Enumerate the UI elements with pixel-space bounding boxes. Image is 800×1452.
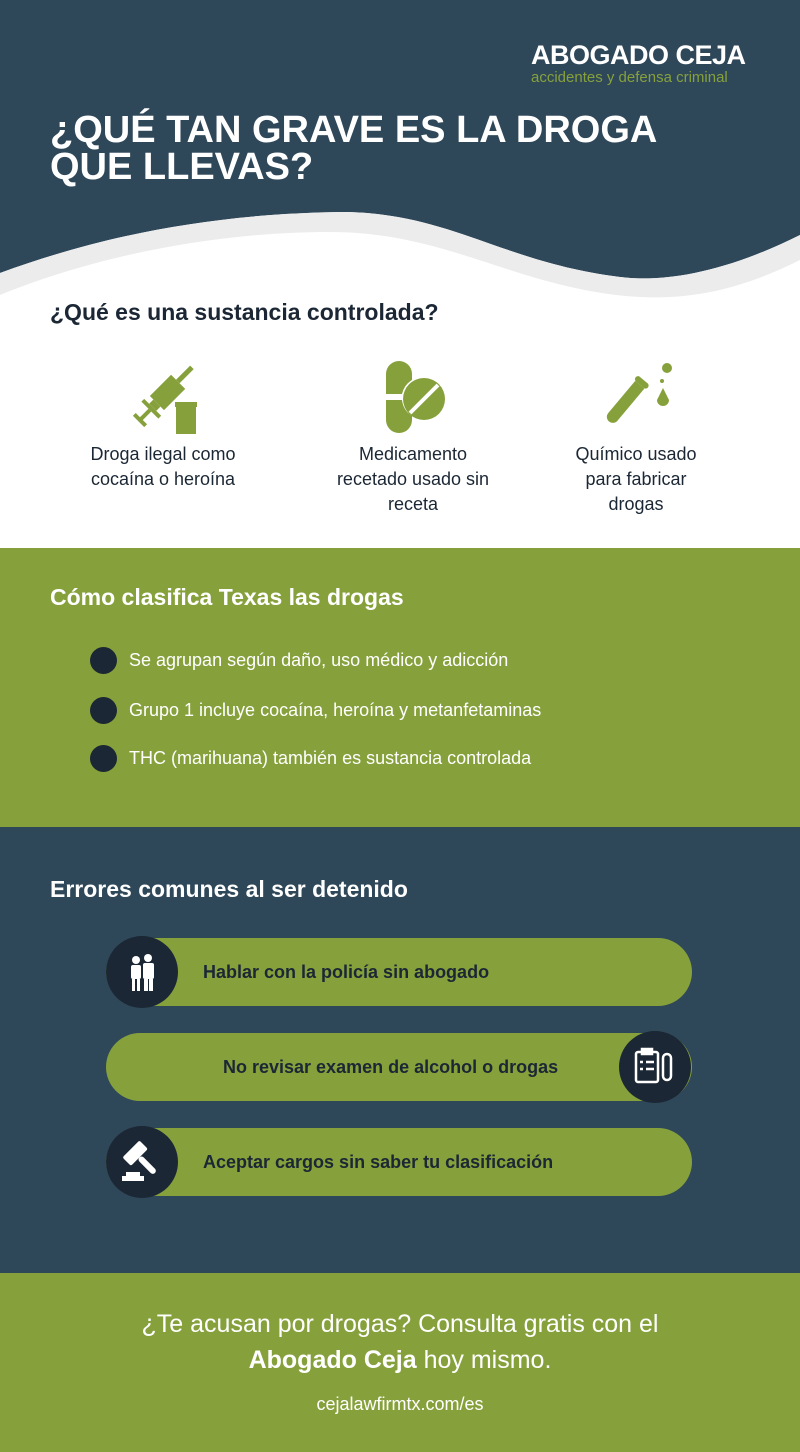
footer call to action (0, 1273, 800, 1452)
label: Químico usado para fabricar drogas (575, 444, 697, 514)
pill 3: Aceptar cargos sin saber tu clasificación (203, 1152, 553, 1172)
pill 2 (106, 1033, 692, 1101)
bullet 2: Grupo 1 incluye cocaína, heroína y metanfetaminas (129, 700, 541, 720)
item: medicamento (337, 361, 489, 514)
cta text: ¿Te acusan por drogas? Consulta gratis con el (142, 1310, 658, 1338)
heading: Errores comunes al ser detenido (50, 876, 408, 902)
pill 1 (106, 938, 692, 1006)
bullet 1 (90, 647, 508, 674)
logo: accidentes y defensa criminal (531, 69, 728, 86)
panel: clasificación (0, 548, 800, 827)
icon: gavel (106, 1126, 178, 1198)
header background with wave (0, 0, 800, 298)
heading: sustancia controlada: ¿Qué es una sustancia controlada? (50, 299, 439, 325)
logo: ABOGADO CEJA (531, 40, 746, 70)
pill 3 (106, 1128, 692, 1196)
icon: test tube (606, 363, 672, 423)
panel: errores (0, 827, 800, 1273)
label: Droga ilegal como cocaína o heroína (90, 444, 236, 489)
logo (531, 40, 746, 86)
title (50, 108, 657, 188)
label: Medicamento recetado usado sin receta (337, 444, 489, 514)
item: químico (575, 363, 697, 514)
item: droga ilegal (90, 366, 236, 489)
icon: pills (386, 361, 445, 433)
bullet 1: Se agrupan según daño, uso médico y adicción (129, 650, 508, 670)
cta text: Abogado Ceja hoy mismo. (249, 1346, 551, 1374)
icon: syringe (132, 366, 197, 434)
url: cejalawfirmtx.com/es (316, 1394, 484, 1414)
icon: clipboard (619, 1031, 691, 1103)
bullet 3: THC (marihuana) también es sustancia controlada (129, 748, 531, 768)
title: QUE LLEVAS? (50, 146, 313, 188)
bullet 3 (90, 745, 532, 772)
pill 2: No revisar examen de alcohol o drogas (223, 1057, 558, 1077)
title: ¿QUÉ TAN GRAVE ES LA DROGA (50, 109, 657, 151)
icon: police (106, 936, 178, 1008)
heading: Cómo clasifica Texas las drogas (50, 584, 404, 610)
cta text (142, 1310, 658, 1374)
pill 1: Hablar con la policía sin abogado (203, 962, 489, 982)
bullet 2 (90, 697, 541, 724)
